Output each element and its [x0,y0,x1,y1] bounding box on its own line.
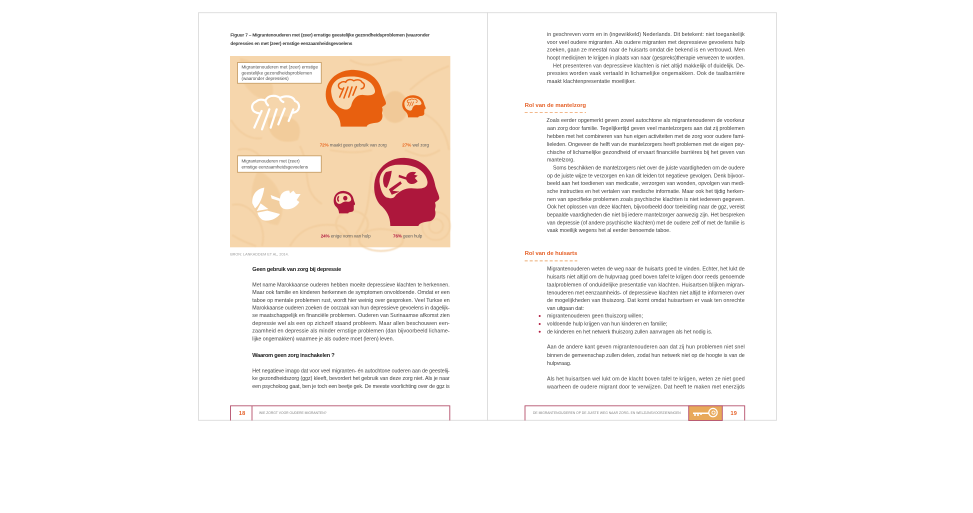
text block: mantelzorg: mantelzorg. [547,158,575,164]
text block: mantelzorg: vaak moeilijk wegens het al eerder benoemde taboe. [547,228,671,234]
stat: 27%: 27% wel zorg [402,143,429,148]
text block: depressie: lijke ongemakken) waarmee je als oudere moet (leren) leven. [252,336,394,342]
heading: rol van de huisarts [525,251,577,261]
text block: andere kant [547,345,745,367]
text block: klacht boven tafel: Als het huisartsen wel lukt om de klacht boven tafel te krijgen, weten ze niet goed [547,376,745,382]
heading: rol van de mantelzorg: Rol van de mantelzorg [525,103,586,109]
panel: infographic figure [230,56,450,251]
text block: mantelzorg: bepaalde vaardigheden die niet bij iedere mantelzorger aanwezig zijn. Het bespreken [547,213,745,219]
text block: andere kant: binnen de gemeenschap zullen delen, zodat hun netwerk niet op de hoogte is van de [547,353,745,359]
text block: waarom: ke gezondheidszorg (ggz) kleeft, bevordert het gebruik van deze zorg niet. Als je naar [252,376,450,382]
text block: right page opening: voor veel oudere migranten. Als oudere migranten met depressieve gevoelens hulp [547,40,745,46]
bulleted list: migrantenouderen geen thuiszorg willen; [547,314,643,320]
text block: mantelzorg: lieleden. Ongeveer de helft van de mantelzorgers heeft problemen met de eigen psy- [547,142,745,148]
text block: huisarts: Migrantenouderen weten de weg naar de huisarts goed te vinden. Echter, het lukt de [547,267,745,273]
label: loneliness box: Migrantenouderen met (zeer) [242,159,300,164]
text block: mantelzorg: Soms beschikken de mantelzorgers niet over de juiste vaardigheden om de oudere [553,165,745,171]
heading: rol van de huisarts: Rol van de huisarts [525,251,577,257]
figure caption: depressies en met (zeer) ernstige eenzaamheidsgevoelens [230,41,353,46]
icon: large crimson head [374,158,439,226]
text block: mantelzorg: nen van specifieke problemen zoals psychische klachten is niet iedereen gegeven. [547,197,745,203]
text block: waarom: Het negatieve imago dat voor veel migranten- én autochtone ouderen aan de geestelij- [252,368,450,374]
text block: waarom: een psycholoog gaat, ben je toch een beetje gek. De meeste voorlichting over de ggz is [252,384,450,390]
icon: small crimson head [334,191,355,213]
text block: depressie: Maar ook familie en kinderen herkennen de symptomen onvoldoende. Omdat er een [252,290,450,296]
footer: right page [525,406,745,420]
icon: key on orange block [689,406,722,420]
footer: right page: DE MIGRANTENOUDEREN OP DE JUISTE WEG NAAR ZORG- EN WELZIJNSVOORZIENINGEN [533,411,681,415]
text block: huisarts: huisarts niet altijd om de hulpvraag goed boven tafel te krijgen door reeds genoemde [547,275,745,281]
figure caption: Figuur 7 – Migrantenouderen met (zeer) ernstige geestelijke gezondheidsproblemen (waaronder [230,33,430,38]
label: depression box: geestelijke gezondheidsproblemen [242,71,312,76]
text block: mantelzorg: sche instructies en het vertalen van medische informatie. Maar ook het tijdig herken- [547,189,745,195]
text block: mantelzorg: Zoals eerder opgemerkt geven zowel autochtone als migrantenouderen de voorkeur [546,118,745,124]
bulleted list: voldoende hulp krijgen van hun kinderen en familie; [547,322,667,328]
footer: right page: 19 [730,411,737,417]
bulleted list [539,314,712,335]
text block: depressie: Met name Marokkaanse ouderen hebben moeite depressieve klachten te herkennen. [252,282,450,288]
text block: huisarts: taalproblemen of onduidelijke presentatie van klachten. Huisartsen blijken migran- [547,283,745,289]
text block: huisarts: tenouderen met eenzaamheids- of depressieve klachten niet altijd te informeren over [547,290,745,296]
icon: white broken tulip [252,188,301,221]
text block: right page opening: Het presenteren van depressieve klachten is niet altijd makkelijk of duidelijk. De- [553,63,745,69]
text block: mantelzorg: Ook het oplossen van deze klachten, bijvoorbeeld door toeleiding naar de ggz, vereist [547,205,745,211]
footer: left page: WIE ZORGT VOOR OUDERE MIGRANTEN? [259,411,327,415]
background pattern [231,58,450,251]
footer: left page [230,406,450,420]
footer: left page: 18 [239,411,245,417]
text block: mantelzorg: chische of lichamelijke gezondheid of ervaart financiële barrières bij het geven van [547,150,745,156]
heading: geen gebruik: Geen gebruik van zorg bij depressie [252,267,341,273]
label: depression box: (waaronder depressies) [242,76,289,81]
bulleted list: de kinderen en het netwerk thuiszorg zullen aanvragen als het nodig is. [547,329,712,335]
text block: mantelzorg: hebben met het combineren van hun eigen activiteiten met de zorg voor oudere fami- [547,134,745,140]
text block: mantelzorg: op de juiste wijze te verzorgen en kan dit leiden tot negatieve gevolgen. Denk bijvoor- [547,173,745,179]
text block: huisarts [547,267,745,312]
text block: right page opening [547,32,745,85]
stat: 76%: 76% geen hulp [393,234,423,239]
stat: 72%: 72% maakt geen gebruik van zorg [320,143,387,148]
text block: depressie: zaamheid en depressie als minder ernstige problemen (dan bijvoorbeeld lichame- [252,329,450,335]
text block: depressie: depressie wel als een op zichzelf staand probleem. Maar allen beschouwen een- [252,321,450,327]
text block: right page opening: maakt klachtenpresentatie moeilijker. [547,79,636,85]
text block: huisarts: de mogelijkheden van thuiszorg. Dat komt omdat huisartsen er vaak ten onrechte [547,298,745,304]
text block: mantelzorg: van depressie (of andere psychische klachten) met de oudere zelf of met de familie is [547,220,745,226]
text block: klacht boven tafel: waarheen de oudere migrant door te verwijzen. Dat heeft te maken met enerzijds [547,384,745,390]
page frames [198,13,776,420]
label: depression box [238,62,321,83]
icon: large orange head [326,70,386,127]
text block: klacht boven tafel [547,376,745,390]
text block: depressie: taboe op mentale problemen rust, wordt hier weinig over gesproken. Veel Turkse en [252,298,450,304]
text block: mantelzorg: beeld aan het toedienen van medicatie, verzorgen van wonden, opvolgen van medi- [547,181,745,187]
text block: right page opening: pressies worden vaak vertaald in lichamelijke ongemakken. Ook de taalbarrière [547,71,745,77]
text block: right page opening: in geschreven vorm en in (ingewikkeld) Nederlands. Dit betekent: niet toegankelijk [547,32,745,38]
label: depression box: Migrantenouderen met (zeer) ernstige [242,65,318,70]
text block: depressie: Marokkaanse ouderen zoeken de oorzaak van hun depressieve gevoelens in dagelijk- [252,306,450,312]
text block: depressie: se maatschappelijk en financiële problemen. Ouderen van Surinaamse afkomst zien [252,313,450,319]
text block: depressie [252,282,450,342]
icon: small orange head [402,95,426,117]
label: loneliness box [238,156,321,172]
label: loneliness box: ernstige eenzaamheidsgevoelens [242,165,309,170]
heading: rol van de mantelzorg [525,103,586,112]
text block: huisarts: van uitgaan dat: [547,306,584,312]
figure source: BRON: LANKADDEM ET AL, 2014. [230,252,289,256]
stat: 24%: 24% enige vorm van hulp [321,234,371,239]
text block: waarom [252,368,450,390]
heading: waarom: Waarom geen zorg inschakelen ? [252,353,335,359]
figure caption [230,33,430,46]
text block: andere kant: Aan de andere kant geven migrantenouderen aan dat zij hun problemen niet snel [547,345,745,351]
icon: white rain cloud [252,96,299,129]
text block: andere kant: hulpvraag. [547,361,571,367]
text block: mantelzorg: aan zorg door familie. Tegelijkertijd geven veel mantelzorgers aan dat zij problemen [547,126,745,132]
text block: mantelzorg [546,118,745,234]
text block: right page opening: zoeken, gaan ze meestal naar de huisarts omdat die bekend is en vertrouwd. Men [547,48,745,54]
text block: right page opening: hoopt medicijnen te krijgen in plaats van naar (gespreks)therapie verwezen te worden. [547,56,745,62]
